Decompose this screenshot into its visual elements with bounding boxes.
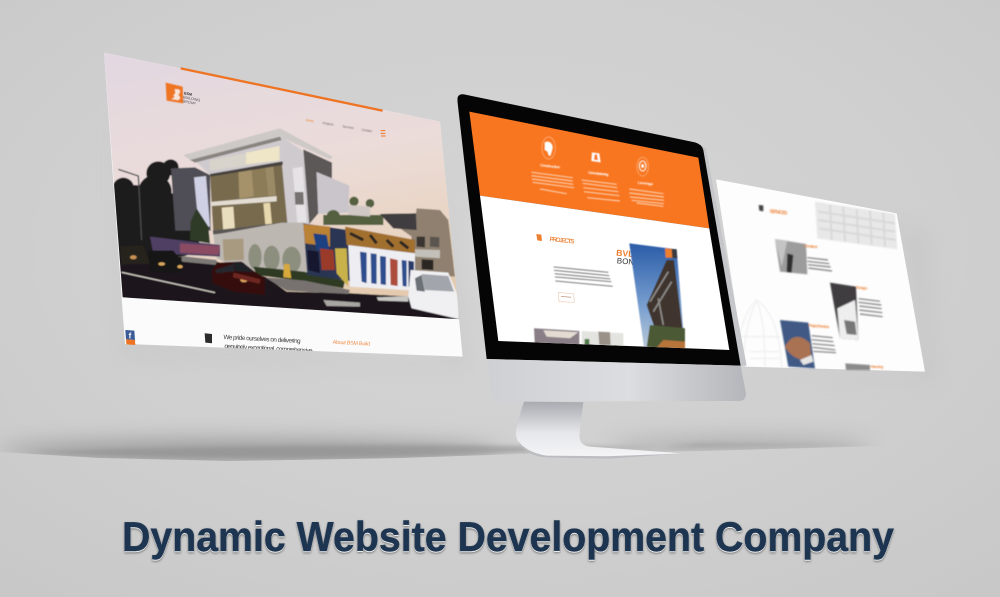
roof bbox=[183, 128, 333, 160]
service image: handshake bbox=[780, 320, 815, 368]
accent line bbox=[181, 68, 383, 111]
road bbox=[118, 257, 462, 323]
rooftop greens bbox=[323, 197, 383, 225]
low mural left bbox=[150, 237, 220, 257]
intro text: genuinely exceptional, comprehensive bbox=[224, 343, 313, 355]
project subname: BOND bbox=[616, 256, 640, 267]
car: dark left bbox=[120, 245, 150, 264]
intro text bbox=[224, 334, 312, 351]
panel: right website mockup bbox=[716, 179, 925, 372]
upper balcony bbox=[210, 154, 246, 170]
navigation: Contact bbox=[362, 128, 372, 133]
neighbouring building bbox=[401, 208, 455, 277]
projects icon bbox=[536, 234, 542, 241]
small logo bbox=[205, 333, 212, 343]
pedestrian bbox=[283, 264, 291, 278]
heading: SERVICES bbox=[769, 209, 788, 217]
navigation: Home bbox=[306, 118, 314, 123]
stand bbox=[516, 402, 680, 458]
monitor bbox=[457, 94, 747, 459]
logo mark bbox=[166, 83, 183, 103]
facebook button: f bbox=[129, 331, 132, 340]
infographic canvas bbox=[0, 52, 925, 564]
service text 2 bbox=[859, 299, 883, 317]
feature: building: Commissioning bbox=[588, 171, 609, 177]
hedge bbox=[253, 267, 345, 288]
pale planting bbox=[248, 244, 301, 273]
feature: target: Leverage bbox=[638, 181, 653, 186]
mural wall bbox=[302, 223, 410, 282]
logo text: BSM bbox=[184, 91, 192, 97]
thumbnail 1 bbox=[533, 328, 580, 344]
title: Dynamic Website Development Company bbox=[122, 513, 895, 560]
navigation: Services bbox=[342, 124, 355, 130]
logo text: GROUP bbox=[182, 99, 197, 106]
service image: roof bbox=[830, 283, 858, 340]
chin bbox=[487, 359, 746, 402]
road markings bbox=[122, 272, 215, 293]
logo text bbox=[182, 91, 201, 106]
project description bbox=[554, 267, 613, 286]
bottom title: Planning bbox=[871, 364, 884, 369]
heading icon bbox=[759, 205, 763, 211]
project name: BVLD bbox=[616, 248, 640, 260]
side edge bbox=[700, 145, 747, 366]
hero photo sky bbox=[104, 52, 456, 297]
service title 1: Construct bbox=[804, 243, 818, 249]
left wing bbox=[171, 167, 211, 231]
trees bbox=[112, 159, 200, 270]
street lamp bbox=[118, 169, 142, 240]
pavement bbox=[265, 277, 350, 294]
bottom grey image bbox=[845, 363, 870, 370]
feature: head: Construction bbox=[540, 163, 560, 169]
navigation bbox=[306, 118, 372, 133]
stand base shade bbox=[518, 442, 680, 459]
thumbnail 2 bbox=[582, 331, 623, 348]
sketch banner bbox=[815, 202, 897, 249]
ground floor bbox=[213, 223, 308, 275]
van bbox=[408, 270, 459, 319]
facebook button bbox=[125, 330, 135, 345]
menu icon bbox=[381, 131, 386, 136]
screen body bbox=[480, 196, 729, 350]
project photo bbox=[629, 243, 685, 349]
dome sketch bbox=[737, 300, 782, 367]
building body bbox=[197, 137, 310, 224]
logo text: BUILDING bbox=[183, 95, 201, 103]
read more button bbox=[558, 292, 574, 302]
car: red bbox=[212, 262, 265, 295]
soft shadows behind floating screens bbox=[110, 70, 940, 385]
service title 3: Project Services bbox=[809, 323, 830, 329]
navigation: Projects bbox=[323, 121, 334, 127]
right box wing bbox=[317, 172, 349, 214]
bezel bbox=[457, 94, 741, 366]
gold glazing bbox=[210, 162, 287, 232]
projects heading: PROJECTS bbox=[549, 236, 575, 246]
service title 2: Design bbox=[856, 285, 868, 291]
about link: About BSM Build bbox=[333, 340, 370, 348]
panel: left website mockup bbox=[100, 50, 467, 357]
tree by wall bbox=[190, 208, 210, 243]
service text 3 bbox=[812, 336, 836, 353]
screen header bbox=[469, 112, 709, 228]
service image: tower bbox=[775, 239, 807, 274]
right tall column bbox=[303, 149, 332, 224]
floor shadow bbox=[0, 437, 880, 465]
service text 1 bbox=[807, 258, 832, 271]
intro text: We pride ourselves on delivering bbox=[223, 334, 301, 345]
car: dark middle bbox=[150, 250, 184, 270]
